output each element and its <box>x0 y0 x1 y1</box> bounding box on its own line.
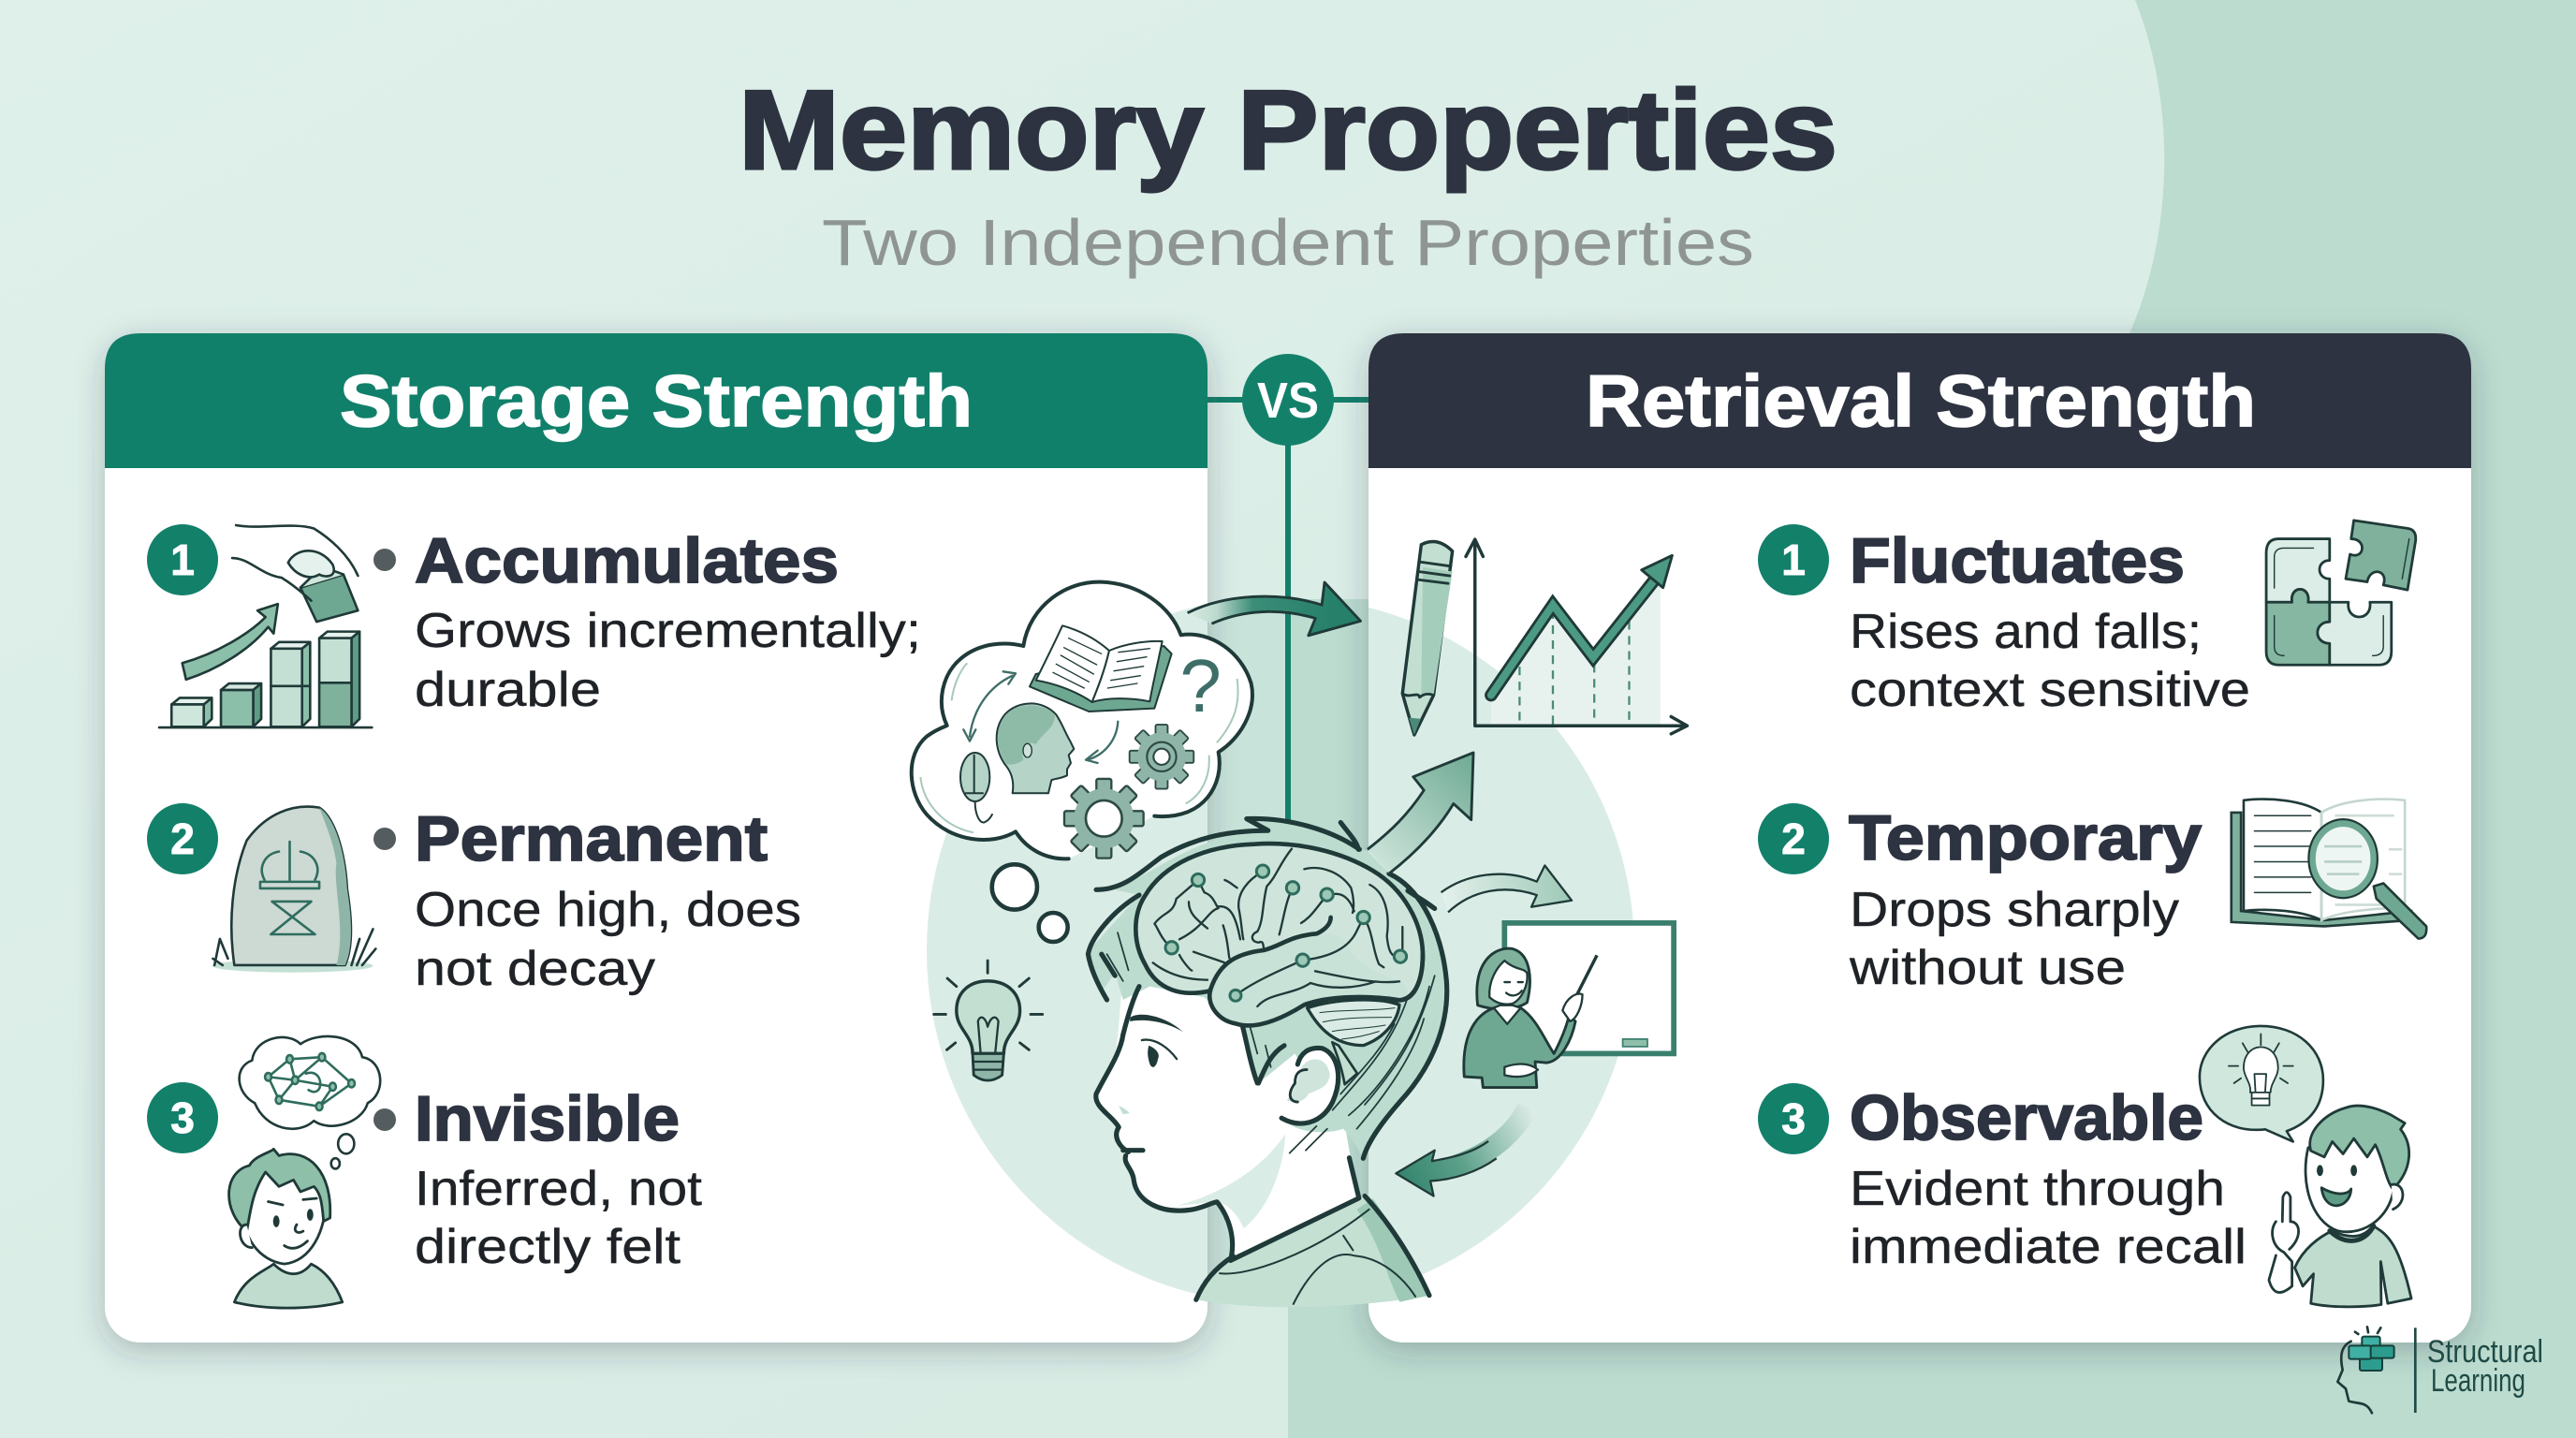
header band: storage <box>105 333 1208 468</box>
panel: retrieval strength card <box>1368 333 2471 1343</box>
heading: accumulates: Accumulates <box>415 525 839 596</box>
icon: thinking boy <box>229 1149 343 1308</box>
header band: retrieval <box>1368 333 2471 468</box>
chart: fluctuating line <box>1466 539 1687 734</box>
backdrop circle <box>927 596 1634 1304</box>
description: Once high, does <box>415 883 801 937</box>
icon: lightbulb <box>934 961 1043 1080</box>
retrieval item 3 <box>1758 1082 2247 1274</box>
icon: book with magnifier <box>2232 800 2426 939</box>
background <box>1208 0 2576 1438</box>
thought cloud <box>912 582 1252 858</box>
shirt <box>1196 1194 1429 1307</box>
vs badge: VS <box>1257 373 1319 429</box>
arrow: right to board <box>1442 865 1572 912</box>
badge 1: 1 <box>1781 536 1806 584</box>
retrieval item 1 <box>1758 524 2250 717</box>
description: durable <box>415 663 601 717</box>
icon: carved stone <box>212 807 375 973</box>
question mark: ? <box>1179 644 1222 727</box>
badge 3 <box>147 1082 218 1153</box>
storage item 3 <box>147 1082 703 1274</box>
storage item 1 <box>147 524 921 717</box>
description: Drops sharply <box>1850 883 2179 937</box>
description <box>1849 883 2179 995</box>
description: Inferred, not <box>415 1162 703 1216</box>
badge 3 <box>1758 1083 1829 1154</box>
teacher <box>1464 948 1597 1088</box>
logo text: Learning <box>2431 1363 2525 1399</box>
gear small <box>1130 725 1193 789</box>
subtitle: Two Independent Properties <box>822 206 1754 279</box>
mini head <box>997 703 1074 793</box>
bullet <box>373 828 396 850</box>
description <box>1850 605 2250 717</box>
mouse shape <box>960 753 992 822</box>
logo text <box>2427 1334 2543 1399</box>
heading: permanent: Permanent <box>415 803 768 874</box>
cycle arrows <box>963 671 1118 763</box>
badge 2 <box>147 803 218 874</box>
description: Rises and falls; <box>1850 605 2202 659</box>
heading: invisible: Invisible <box>415 1083 680 1154</box>
icon: speaking boy <box>2269 1106 2411 1307</box>
description: directly felt <box>415 1220 681 1274</box>
arrow: diagonal up <box>1368 753 1473 873</box>
bullet <box>373 549 396 571</box>
book <box>1030 625 1172 712</box>
description: without use <box>1849 941 2126 995</box>
description: Grows incrementally; <box>415 604 921 658</box>
description <box>415 883 801 996</box>
retrieval item 2 <box>1758 802 2202 995</box>
description <box>415 1162 703 1274</box>
badge 1 <box>1758 524 1829 595</box>
storage item 2 <box>147 803 801 996</box>
title: Memory Properties <box>739 67 1837 193</box>
panel: storage strength card <box>105 333 1208 1343</box>
description: Evident through <box>1850 1162 2225 1216</box>
badge 2: 2 <box>1781 814 1806 863</box>
gear large <box>1064 779 1144 858</box>
face and neck <box>1095 981 1359 1260</box>
description <box>1850 1162 2247 1274</box>
head outlines <box>1088 818 1447 1299</box>
whiteboard <box>1504 923 1674 1053</box>
badge 2 <box>1758 803 1829 874</box>
hair <box>1088 818 1447 1158</box>
badge 1 <box>147 524 218 595</box>
logo: structural learning <box>2337 1327 2543 1413</box>
icon: jigsaw puzzle <box>2266 521 2416 665</box>
icon: speech bubble with idea <box>2200 1026 2323 1141</box>
eye and brow <box>1119 1015 1183 1114</box>
description: immediate recall <box>1850 1220 2247 1274</box>
connector: vs lines <box>1203 397 1373 833</box>
teacher at whiteboard <box>1464 923 1674 1088</box>
heading: observable: Observable <box>1850 1082 2203 1153</box>
thought bubbles <box>992 864 1068 942</box>
logo text: Structural <box>2427 1334 2543 1370</box>
description: context sensitive <box>1850 663 2250 717</box>
badge 3: 3 <box>1781 1094 1806 1143</box>
icon: pencil <box>1402 541 1453 735</box>
arrow: return <box>1396 1104 1537 1196</box>
badge 2: 2 <box>170 814 195 863</box>
heading: retrieval strength: Retrieval Strength <box>1586 360 2256 442</box>
neck shading <box>1177 1134 1285 1228</box>
heading: storage strength: Storage Strength <box>340 360 973 442</box>
bullet <box>373 1108 396 1131</box>
brain <box>1135 844 1423 1084</box>
icon: thought cloud with network <box>240 1036 380 1168</box>
heading: temporary: Temporary <box>1849 802 2202 873</box>
vs badge <box>1242 354 1334 446</box>
heading: fluctuates: Fluctuates <box>1850 525 2185 596</box>
logo mark <box>2337 1327 2417 1413</box>
icon: stacking blocks <box>159 525 372 727</box>
badge 1: 1 <box>170 536 195 584</box>
description: not decay <box>415 942 655 996</box>
description <box>415 604 921 717</box>
ear <box>1281 1048 1339 1123</box>
arrow: top curve to chart <box>1188 582 1360 636</box>
central illustration: student <box>1088 818 1447 1307</box>
badge 3: 3 <box>170 1093 195 1142</box>
